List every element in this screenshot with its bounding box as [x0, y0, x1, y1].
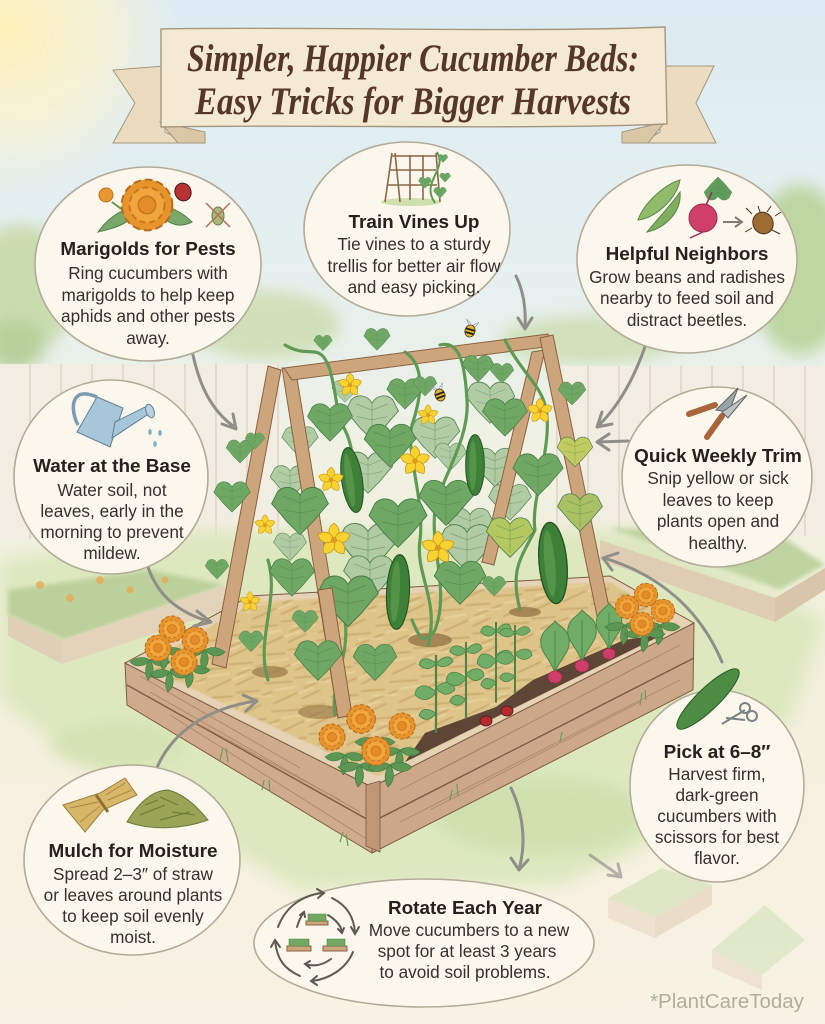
- icon: small trellis with vine: [381, 152, 451, 206]
- marigold cluster left: [130, 616, 225, 692]
- icon: pruners: [689, 388, 747, 437]
- cucumber vines: [264, 340, 547, 715]
- panel: quick weekly trim: healthy.: [689, 533, 747, 553]
- panel: water at the base: leaves, early in the: [40, 501, 184, 521]
- ribbon tails: [113, 66, 187, 143]
- icon: straw bundle and leaf pile: [63, 778, 208, 832]
- panel: water at the base: morning to prevent: [40, 522, 184, 542]
- panel: mulch for moisture: or leaves around plants: [44, 885, 222, 905]
- panel: quick weekly trim: plants open and: [657, 511, 779, 531]
- panel: water at the base: mildew.: [83, 543, 141, 563]
- leaves in front of inner leg: [294, 641, 397, 680]
- inner trellis leg in front of vines: [318, 588, 352, 718]
- straw mulch: [142, 582, 680, 776]
- panel: train vines up: and easy picking.: [348, 277, 480, 297]
- panel: pick at 6-8 inches: Pick at 6–8″: [664, 742, 770, 763]
- panel: mulch for moisture: Spread 2–3″ of straw: [53, 864, 214, 884]
- panel: marigolds for pests: aphids and other pests: [61, 306, 235, 326]
- marigold cluster right: [605, 583, 680, 652]
- panel: marigolds for pests: away.: [126, 328, 170, 348]
- dark soil strip: [405, 634, 664, 762]
- panel: mulch for moisture: to keep soil evenly: [62, 906, 204, 926]
- title text: Simpler, Happier Cucumber Beds:: [187, 37, 639, 80]
- icon: rotation cycle: [271, 889, 359, 985]
- grass tufts along the bed: [220, 690, 646, 846]
- panel: train vines up: trellis for better air flow: [328, 256, 501, 276]
- panel: rotate each year: spot for at least 3 years: [378, 941, 556, 961]
- panel: pick at 6-8 inches: flavor.: [694, 848, 740, 868]
- panel: mulch for moisture: moist.: [110, 927, 156, 947]
- panel: water at the base: [14, 380, 208, 574]
- panel: quick weekly trim: Snip yellow or sick: [647, 468, 789, 488]
- panel: quick weekly trim: [622, 387, 812, 567]
- panel: train vines up: [304, 142, 510, 316]
- panel: rotate each year: [254, 879, 594, 1007]
- panel: pick at 6-8 inches: Harvest firm,: [668, 764, 766, 784]
- panel: quick weekly trim: leaves to keep: [663, 490, 773, 510]
- panel: mulch for moisture: [24, 765, 240, 955]
- ladybugs in soil: [480, 706, 513, 726]
- background garden beds rotated, lower right: [608, 868, 805, 990]
- faint background leaves: [270, 380, 531, 600]
- icon: cucumber and scissors: [670, 662, 757, 736]
- icon: watering can: [73, 394, 162, 447]
- arrows: [148, 276, 722, 877]
- panel: marigolds for pests: Marigolds for Pests: [60, 239, 236, 260]
- panel: pick at 6-8 inches: cucumbers with: [657, 806, 777, 826]
- panel: rotate each year: to avoid soil problems.: [379, 962, 551, 982]
- icon: marigold, ladybug, crossed bug: [98, 180, 230, 232]
- panel: helpful neighbors: Helpful Neighbors: [606, 244, 768, 265]
- panel: marigolds for pests: marigolds to help keep: [62, 285, 234, 305]
- panel: helpful neighbors: Grow beans and radishes: [589, 267, 785, 287]
- icon: pea pods, radish, beetle: [638, 177, 781, 238]
- panel: train vines up: Train Vines Up: [349, 212, 479, 233]
- trellis front frame: [212, 334, 610, 668]
- panel: water at the base: Water soil, not: [57, 480, 167, 500]
- panel: pick at 6-8 inches: dark-green: [675, 785, 759, 805]
- title banner: [113, 27, 716, 143]
- trellis back legs: [282, 350, 545, 718]
- panel: pick at 6-8 inches: scissors for best: [655, 827, 779, 847]
- bees: [430, 319, 479, 403]
- cucumber leaves: [205, 328, 602, 652]
- panel: helpful neighbors: nearby to feed soil and: [600, 288, 774, 308]
- panel: rotate each year: Rotate Each Year: [388, 898, 543, 919]
- cucumbers: [337, 435, 570, 630]
- marigold cluster front: [319, 705, 420, 787]
- watermark: *PlantCareToday: [650, 990, 805, 1013]
- ribbon body: [161, 27, 667, 127]
- panel: quick weekly trim: Quick Weekly Trim: [634, 446, 802, 467]
- panel: marigolds for pests: [35, 167, 261, 361]
- panel: helpful neighbors: distract beetles.: [627, 310, 747, 330]
- background garden bed left: [8, 570, 225, 664]
- panel: rotate each year: Move cucumbers to a new: [369, 920, 570, 940]
- title banner: Easy Tricks for Bigger Harvests: [194, 80, 631, 123]
- panel: marigolds for pests: Ring cucumbers with: [68, 263, 228, 283]
- yellow flowers: [239, 373, 553, 612]
- panel: mulch for moisture: Mulch for Moisture: [49, 841, 217, 862]
- background garden bed right: [600, 528, 825, 622]
- panel: train vines up: Tie vines to a sturdy: [337, 234, 491, 254]
- panel: helpful neighbors: [577, 165, 797, 353]
- panel: pick at 6-8 inches: [630, 662, 804, 882]
- seedlings: [415, 603, 622, 733]
- raised bed: [125, 576, 694, 853]
- panel: water at the base: Water at the Base: [33, 456, 191, 477]
